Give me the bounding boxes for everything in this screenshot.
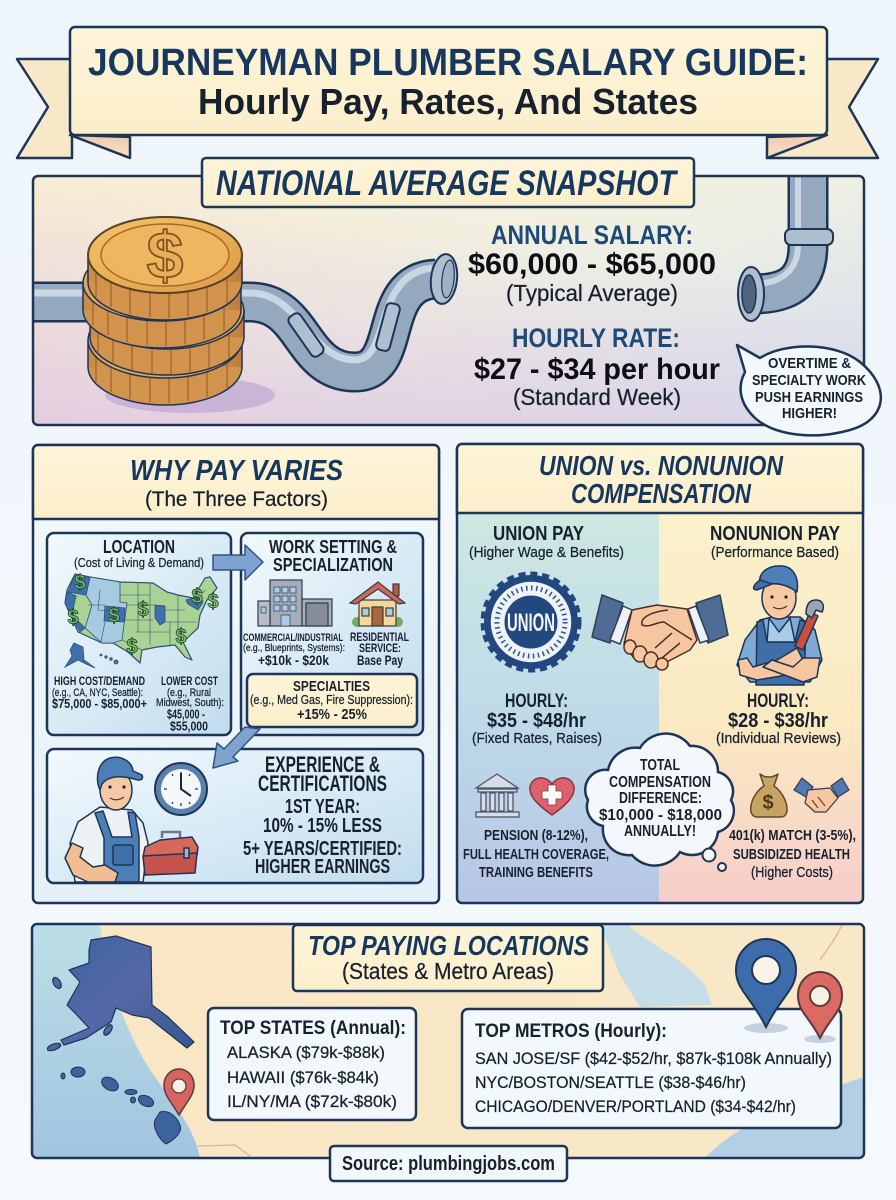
- map dollar markers: $: [108, 605, 120, 627]
- heading: national average snapshot: NATIONAL AVERAGE SNAPSHOT: [216, 164, 678, 203]
- nonunion pay column heading: [710, 523, 841, 561]
- callout: overtime speech bubble: PUSH EARNINGS: [755, 389, 863, 406]
- banner left ribbon tail: [17, 59, 130, 158]
- card: work setting and specialization: [241, 533, 423, 735]
- map: hawaii islands: [61, 1067, 181, 1144]
- map dollar markers: $: [67, 607, 79, 629]
- annual salary figures: ANNUAL SALARY:: [491, 220, 693, 250]
- hourly rate figures: $27 - $34 per hour: [474, 353, 720, 386]
- map dollar markers: $: [74, 572, 86, 594]
- heading: top paying locations: [293, 925, 603, 991]
- location: high cost: (e.g., CA, NYC, Seattle):: [52, 687, 143, 699]
- pipe wrench: [795, 600, 823, 650]
- location: high cost: HIGH COST/DEMAND: [54, 674, 145, 688]
- union benefits text: [463, 828, 609, 881]
- nonunion hourly rate: [716, 691, 841, 747]
- callout: specialties: +15% - 25%: [297, 706, 367, 723]
- heading: union vs nonunion: [457, 444, 863, 513]
- map dollar markers: [67, 572, 219, 658]
- box: top metros: CHICAGO/DENVER/PORTLAND ($34-$42/hr): [475, 1097, 796, 1116]
- map dollar markers: $: [175, 626, 187, 648]
- nonunion benefits text: [729, 828, 856, 881]
- location: lower cost: [156, 674, 224, 734]
- location: lower cost: (e.g., Rural: [167, 687, 211, 699]
- icon: large red map pin: [798, 972, 842, 1043]
- union pay column heading: (Higher Wage & Benefits): [469, 544, 624, 561]
- heading: union vs nonunion: COMPENSATION: [571, 478, 752, 509]
- commercial pay text: [243, 632, 345, 668]
- nonunion benefits text: SUBSIDIZED HEALTH: [733, 847, 850, 863]
- residential pay text: RESIDENTIAL: [350, 630, 409, 644]
- residential pay text: SERVICE:: [359, 641, 401, 655]
- location: lower cost: $45,000 -: [167, 708, 205, 722]
- arrow: location to work setting: [213, 545, 263, 580]
- union hourly rate: [472, 691, 602, 747]
- icon: handshake: [592, 595, 728, 670]
- pipe: left run and trap: [33, 253, 460, 372]
- hourly rate figures: HOURLY RATE:: [512, 323, 680, 353]
- panel: national average snapshot: [33, 176, 881, 435]
- location: lower cost: $55,000: [170, 720, 208, 734]
- pipe: right elbow: [738, 177, 833, 321]
- map water areas: [32, 924, 864, 1158]
- main title: JOURNEYMAN PLUMBER SALARY GUIDE:: [88, 42, 808, 84]
- icon: plumber with toolbox: [65, 757, 198, 882]
- nonunion pay column heading: (Performance Based): [711, 544, 839, 561]
- heading: union vs nonunion: UNION vs. NONUNION: [539, 450, 784, 481]
- union benefits text: PENSION (8-12%),: [484, 828, 588, 844]
- icon: small handshake: [794, 778, 849, 812]
- card: location: [47, 533, 231, 735]
- card: experience and certifications: [47, 727, 423, 883]
- box: top states: [208, 1008, 416, 1120]
- box: top metros: NYC/BOSTON/SEATTLE ($38-$46/hr): [475, 1073, 746, 1092]
- nonunion benefits text: (Higher Costs): [751, 865, 833, 881]
- residential pay text: Base Pay: [357, 652, 403, 668]
- coin 2: [83, 245, 241, 348]
- hourly rate figures: [474, 323, 720, 410]
- coin 1 with dollar sign: $: [147, 218, 183, 292]
- heading: national average snapshot: [202, 158, 694, 207]
- box: top states: TOP STATES (Annual):: [220, 1018, 406, 1039]
- callout: total compensation difference cloud: DIFFERENCE:: [619, 790, 702, 807]
- annual salary figures: [468, 220, 716, 306]
- icon: nonunion plumber with wrench: [737, 566, 823, 685]
- heading: why pay varies: [33, 445, 439, 519]
- box: top metros: SAN JOSE/SF ($42-$52/hr, $87k-$108k Annually): [475, 1049, 832, 1068]
- card: work setting and specialization: WORK SETTING &: [269, 537, 397, 557]
- heading: why pay varies: WHY PAY VARIES: [130, 455, 344, 487]
- map dollar markers: $: [126, 636, 138, 658]
- icon: small red map pin: [164, 1069, 194, 1115]
- icon: money bag: $: [762, 792, 774, 814]
- experience text: EXPERIENCE &: [265, 752, 380, 777]
- location: high cost: $75,000 - $85,000+: [52, 697, 147, 711]
- coin 1 with dollar sign: [88, 217, 242, 320]
- union hourly rate: (Fixed Rates, Raises): [472, 730, 602, 747]
- nonunion hourly rate: (Individual Reviews): [716, 730, 841, 747]
- icon: union seal: [484, 575, 578, 669]
- union pay column heading: [469, 523, 624, 561]
- location: lower cost: LOWER COST: [161, 674, 218, 688]
- subtitle: Hourly Pay, Rates, And States: [198, 81, 698, 122]
- panel: top paying locations: [32, 924, 864, 1158]
- callout: specialties: SPECIALTIES: [293, 678, 370, 695]
- commercial pay text: +$10k - $20k: [258, 652, 329, 668]
- union benefits text: TRAINING BENEFITS: [479, 865, 593, 881]
- experience text: HIGHER EARNINGS: [255, 856, 390, 878]
- callout: overtime speech bubble: OVERTIME &: [768, 355, 851, 372]
- commercial pay text: COMMERCIAL/INDUSTRIAL: [243, 632, 343, 644]
- icon: money bag: [751, 774, 787, 817]
- residential pay text: [350, 630, 409, 668]
- union hourly rate: $35 - $48/hr: [487, 710, 586, 732]
- icon: stack of gold coins: [83, 217, 275, 413]
- map alaska and hawaii insets: [65, 643, 118, 668]
- callout: total compensation difference cloud: [585, 734, 734, 871]
- callout: specialties: [247, 674, 417, 727]
- map: united states: [65, 572, 219, 668]
- banner right ribbon tail: [767, 59, 878, 158]
- box: top states: HAWAII ($76k-$84k): [227, 1068, 379, 1087]
- callout: total compensation difference cloud: COMPENSATION: [609, 774, 711, 791]
- nonunion pay column heading: NONUNION PAY: [710, 523, 841, 545]
- source credit: Source: plumbingjobs.com: [342, 1153, 555, 1175]
- experience text: [243, 752, 402, 878]
- icon: large blue map pin: [736, 939, 796, 1033]
- callout: total compensation difference cloud: ANNUALLY!: [624, 823, 696, 840]
- nonunion benefits text: 401(k) MATCH (3-5%),: [729, 828, 856, 844]
- nonunion hourly rate: $28 - $38/hr: [728, 710, 828, 732]
- map: alaska: [46, 936, 194, 1052]
- annual salary figures: $60,000 - $65,000: [468, 248, 716, 281]
- card: work setting and specialization: SPECIALIZATION: [273, 555, 393, 575]
- icon: union seal: UNION: [507, 609, 555, 637]
- map dollar markers: $: [207, 591, 219, 613]
- coin 3: [90, 273, 244, 375]
- heading: why pay varies: (The Three Factors): [145, 488, 328, 511]
- heading: top paying locations: (States & Metro Areas): [342, 958, 554, 984]
- card: location: LOCATION: [103, 537, 175, 557]
- heading: top paying locations: TOP PAYING LOCATIONS: [308, 930, 589, 961]
- icon: house: [350, 582, 405, 627]
- location: lower cost: Midwest, South):: [156, 697, 224, 709]
- arrow: specialties to experience: [213, 727, 260, 768]
- panel: why pay varies: [33, 445, 439, 903]
- box: top metros: TOP METROS (Hourly):: [475, 1021, 667, 1042]
- annual salary figures: (Typical Average): [506, 280, 678, 306]
- box: top states: ALASKA ($79k-$88k): [227, 1043, 385, 1062]
- callout: specialties: (e.g., Med Gas, Fire Suppression):: [250, 693, 413, 707]
- icon: commercial building: [258, 580, 332, 626]
- union pay column heading: UNION PAY: [493, 523, 585, 545]
- map dollar markers: $: [191, 586, 203, 608]
- experience text: 10% - 15% LESS: [263, 815, 382, 837]
- pipe collars: [287, 253, 460, 359]
- source credit: [330, 1146, 567, 1181]
- callout: overtime speech bubble: HIGHER!: [782, 405, 837, 422]
- icon: health heart: [530, 778, 574, 815]
- callout: overtime speech bubble: SPECIALTY WORK: [752, 372, 866, 389]
- experience text: CERTIFICATIONS: [258, 771, 387, 796]
- map dollar markers: $: [137, 599, 149, 621]
- experience text: 5+ YEARS/CERTIFIED:: [243, 838, 402, 860]
- experience text: 1ST YEAR:: [285, 796, 360, 818]
- union hourly rate: HOURLY:: [505, 691, 568, 712]
- panel: union vs nonunion: [457, 444, 863, 903]
- icon: clock: [155, 763, 207, 815]
- icon: pension bank: [476, 774, 519, 817]
- nonunion hourly rate: HOURLY:: [747, 691, 809, 712]
- union benefits text: FULL HEALTH COVERAGE,: [463, 847, 609, 863]
- title banner: [17, 27, 878, 158]
- callout: total compensation difference cloud: TOTAL: [640, 757, 680, 774]
- box: top metros: [462, 1009, 841, 1128]
- coin 4: [88, 302, 242, 405]
- callout: total compensation difference cloud: $10,000 - $18,000: [599, 807, 722, 824]
- hourly rate figures: (Standard Week): [513, 384, 681, 410]
- box: top states: IL/NY/MA ($72k-$80k): [227, 1092, 397, 1111]
- location: high cost: [52, 674, 147, 711]
- commercial pay text: (e.g., Blueprints, Systems):: [243, 643, 345, 654]
- toolbox: [143, 832, 198, 875]
- callout: overtime speech bubble: [737, 345, 881, 435]
- card: location: (Cost of Living & Demand): [74, 555, 204, 570]
